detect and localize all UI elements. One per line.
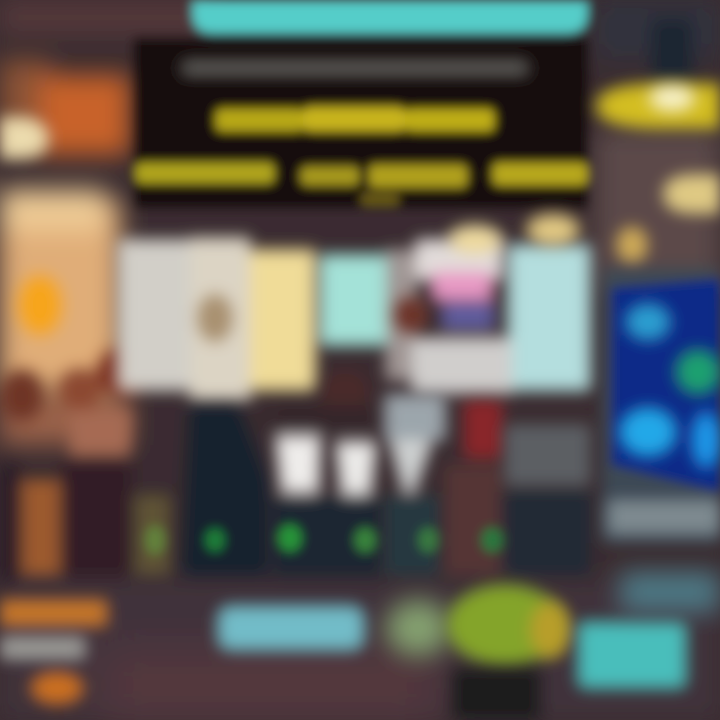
person: white shirt centre left — [272, 370, 382, 576]
panel: aqua floor box — [578, 622, 686, 688]
person: right blue-grey — [505, 425, 590, 575]
icon: glowing orange light — [18, 275, 62, 335]
lamps above the cards — [449, 215, 579, 254]
heading: small grey title line — [182, 60, 528, 76]
panel: row of colourful info cards — [118, 238, 590, 400]
group of standing people — [182, 294, 590, 576]
icon: right hanging yellow lamp — [597, 20, 720, 128]
heading: yellow headline line one — [215, 106, 495, 132]
icon: right wall lamps — [617, 175, 720, 263]
icon: green potted plant — [386, 585, 570, 720]
person: grey shirt — [385, 296, 445, 575]
green table markers — [145, 524, 503, 555]
panel: black title board — [134, 38, 588, 208]
person: dark suit — [182, 294, 268, 575]
panel: teal floor mat — [218, 606, 364, 650]
top teal banner — [192, 0, 588, 34]
icon: left ceiling lamp — [0, 118, 48, 158]
right floor shadow panel — [620, 572, 720, 612]
heading: yellow headline line two — [135, 162, 588, 206]
panel: wall screen with map — [602, 268, 720, 543]
panel: left warm cafe wall — [0, 60, 130, 445]
floor items left — [0, 600, 107, 704]
person: red shirt — [445, 400, 503, 575]
left group of seated people — [0, 348, 170, 580]
